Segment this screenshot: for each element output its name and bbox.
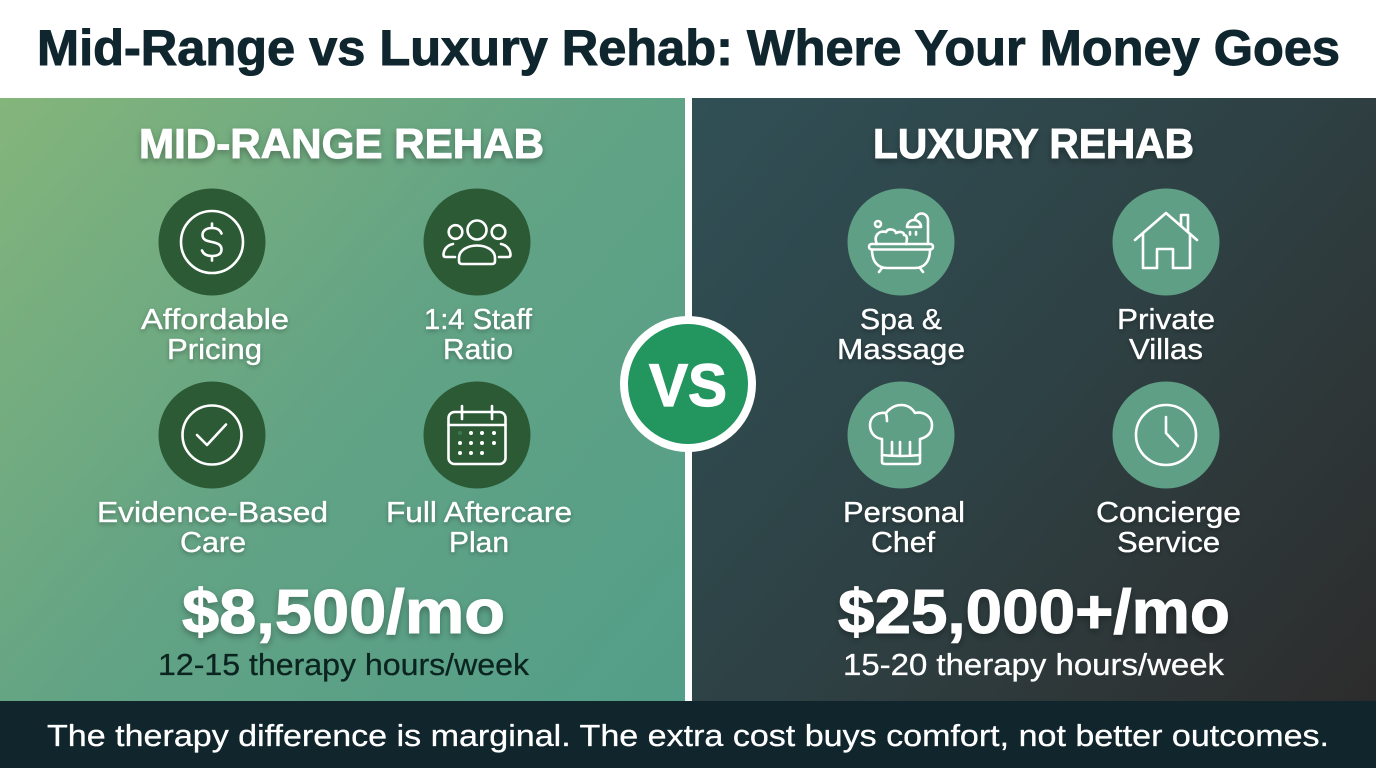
icon: check mark <box>182 406 242 464</box>
label: affordable pricing: Pricing <box>167 334 262 366</box>
feature: affordable pricing <box>141 188 289 366</box>
label: personal chef: Personal <box>843 497 965 529</box>
feature: aftercare plan <box>386 382 572 559</box>
label: affordable pricing: Affordable <box>141 304 289 336</box>
icon: chef hat <box>870 405 932 464</box>
feature: evidence-based care <box>97 382 328 559</box>
label: spa and massage: Massage <box>837 334 965 366</box>
price: luxury: $25,000+/mo <box>838 578 1230 647</box>
label: concierge service: Concierge <box>1096 497 1241 529</box>
icon: group of people <box>444 220 510 264</box>
therapy hours: mid-range: 12-15 therapy hours/week <box>158 647 530 682</box>
vs badge: VS <box>649 352 727 419</box>
therapy hours: luxury: 15-20 therapy hours/week <box>843 647 1225 682</box>
icon: dollar coin <box>181 211 243 273</box>
heading: mid-range rehab: MID-RANGE REHAB <box>139 120 544 167</box>
panel: luxury rehab <box>692 98 1376 701</box>
icon: house <box>1135 213 1197 268</box>
label: evidence-based care: Care <box>180 527 246 559</box>
feature: private villas <box>1112 188 1220 366</box>
vs badge <box>620 316 756 452</box>
footer banner: The therapy difference is marginal. The extra cost buys comfort, not better outcomes. <box>47 718 1329 753</box>
label: concierge service: Service <box>1117 527 1220 559</box>
label: staff ratio: Ratio <box>443 334 513 366</box>
feature: spa and massage <box>837 188 965 366</box>
footer banner <box>0 701 1376 768</box>
icon: bathtub <box>869 214 933 272</box>
label: aftercare plan: Plan <box>449 527 509 559</box>
label: personal chef: Chef <box>871 527 936 559</box>
icon: clock <box>1136 405 1196 465</box>
label: private villas: Private <box>1117 304 1215 336</box>
icon: calendar <box>448 406 506 464</box>
panel: mid-range rehab <box>0 98 685 701</box>
label: spa and massage: Spa & <box>860 304 942 336</box>
label: private villas: Villas <box>1129 334 1203 366</box>
feature: personal chef <box>843 382 965 559</box>
feature: concierge service <box>1096 382 1241 559</box>
feature: staff ratio <box>424 188 533 366</box>
label: staff ratio: 1:4 Staff <box>424 304 533 336</box>
title: Mid-Range vs Luxury Rehab: Where Your Money Goes <box>37 20 1340 76</box>
price: mid-range: $8,500/mo <box>182 578 505 647</box>
label: evidence-based care: Evidence-Based <box>97 497 328 529</box>
heading: luxury rehab: LUXURY REHAB <box>873 120 1194 167</box>
label: aftercare plan: Full Aftercare <box>386 497 572 529</box>
